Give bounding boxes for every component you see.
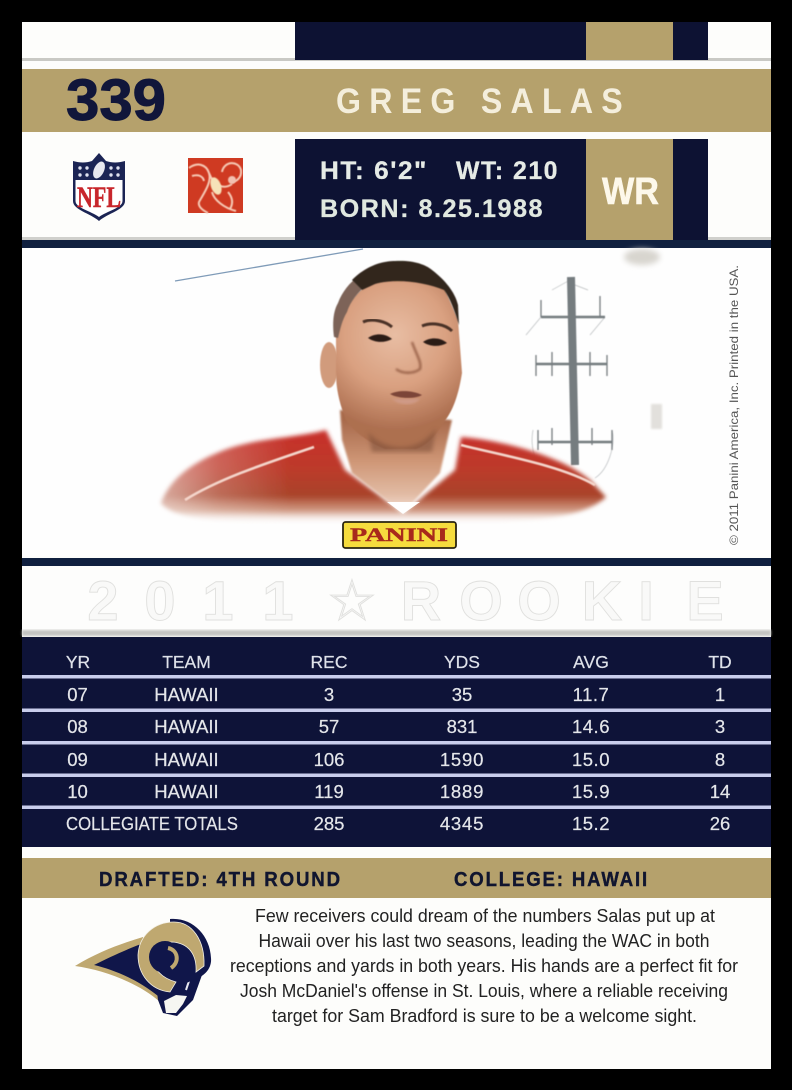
card number: 339 xyxy=(66,68,166,133)
panel: height weight birth date: HT: 6'2" xyxy=(320,157,428,185)
row 2009 xyxy=(67,749,725,770)
biography text: receptions and yards in both years. His hands are a perfect fit for xyxy=(230,955,738,976)
row 2008: 57 xyxy=(319,716,339,737)
Panini logo: PANINI xyxy=(350,525,448,546)
biography text: Few receivers could dream of the numbers Salas put up at xyxy=(255,905,715,926)
row totals: 15.2 xyxy=(572,813,610,834)
row 2009: HAWAII xyxy=(154,749,219,770)
row totals: 285 xyxy=(314,813,344,834)
biography text xyxy=(230,905,738,1026)
row 2007: 3 xyxy=(324,684,334,705)
row 2007: 35 xyxy=(452,684,472,705)
row 2008: 831 xyxy=(447,716,477,737)
photo panel xyxy=(22,248,771,556)
table header: TEAM xyxy=(162,652,211,672)
row 2007: 1 xyxy=(715,684,725,705)
row 2008 xyxy=(67,716,725,737)
table header xyxy=(66,652,732,672)
row 2010: HAWAII xyxy=(154,781,219,802)
icon: NFL shield xyxy=(73,153,125,221)
row 2008: 08 xyxy=(67,716,88,737)
draft and college band xyxy=(22,858,771,898)
row totals: COLLEGIATE TOTALS xyxy=(66,813,238,834)
table header: YR xyxy=(66,652,90,672)
biography text: Josh McDaniel's offense in St. Louis, where a reliable receiving xyxy=(240,980,728,1001)
brows xyxy=(363,320,452,331)
table header: YDS xyxy=(444,652,480,672)
panel: position xyxy=(586,139,673,240)
panel: height weight birth date xyxy=(295,139,586,240)
icon: Rams logo xyxy=(75,919,211,1016)
eyes xyxy=(368,334,447,346)
biography text: target for Sam Bradford is sure to be a welcome sight. xyxy=(272,1005,697,1026)
table header: TD xyxy=(708,652,732,672)
row 2009: 106 xyxy=(314,749,344,770)
embossed rookie banner: 2011☆ROOKIE xyxy=(87,569,724,632)
row 2009: 09 xyxy=(67,749,88,770)
info blocks xyxy=(22,139,771,240)
hair xyxy=(333,261,459,338)
ear xyxy=(320,342,338,388)
neck xyxy=(340,410,452,513)
row totals: 4345 xyxy=(440,813,484,834)
row 2008: 14.6 xyxy=(572,716,610,737)
icon: red player logo xyxy=(188,158,243,213)
player portrait xyxy=(161,261,606,522)
header band: number and name xyxy=(22,68,771,133)
college: COLLEGE: HAWAII xyxy=(454,869,649,891)
table header: AVG xyxy=(573,652,609,672)
jersey V-neck xyxy=(387,502,420,514)
background wire xyxy=(175,249,363,281)
icon: NFL shield: NFL xyxy=(77,181,121,214)
jersey shoulder stripes xyxy=(185,445,595,500)
nose xyxy=(396,342,420,373)
Panini logo xyxy=(343,522,456,548)
row 2010: 10 xyxy=(67,781,88,802)
row 2009: 15.0 xyxy=(572,749,610,770)
row 2008: HAWAII xyxy=(154,716,219,737)
row 2007: 07 xyxy=(67,684,88,705)
chin shadow xyxy=(368,428,436,452)
player name: GREG SALAS xyxy=(336,82,631,121)
table header: REC xyxy=(311,652,347,672)
row 2010: 119 xyxy=(314,781,344,802)
panel: height weight birth date: BORN: 8.25.1988 xyxy=(320,195,544,223)
row 2010: 1889 xyxy=(440,781,484,802)
drafted: DRAFTED: 4TH ROUND xyxy=(99,869,342,891)
panel: height weight birth date: WT: 210 xyxy=(456,157,559,185)
row 2010 xyxy=(67,781,730,802)
row 2010: 14 xyxy=(710,781,730,802)
row 2009: 1590 xyxy=(440,749,484,770)
face xyxy=(336,278,462,449)
background smudges xyxy=(624,249,662,429)
stats table xyxy=(22,637,771,847)
utility pole xyxy=(526,277,613,478)
row totals: 26 xyxy=(710,813,730,834)
row 2010: 15.9 xyxy=(572,781,610,802)
copyright line: © 2011 Panini America, Inc. Printed in the USA. xyxy=(728,265,741,545)
row 2007 xyxy=(67,684,725,705)
panel: position: WR xyxy=(602,171,659,213)
row 2008: 3 xyxy=(715,716,725,737)
row 2009: 8 xyxy=(715,749,725,770)
jersey xyxy=(161,430,606,522)
row 2007: HAWAII xyxy=(154,684,219,705)
biography text: Hawaii over his last two seasons, leading the WAC in both xyxy=(258,930,710,951)
row 2007: 11.7 xyxy=(573,684,609,705)
mouth xyxy=(390,391,422,398)
top colour strips xyxy=(22,22,771,61)
row totals xyxy=(66,813,730,834)
